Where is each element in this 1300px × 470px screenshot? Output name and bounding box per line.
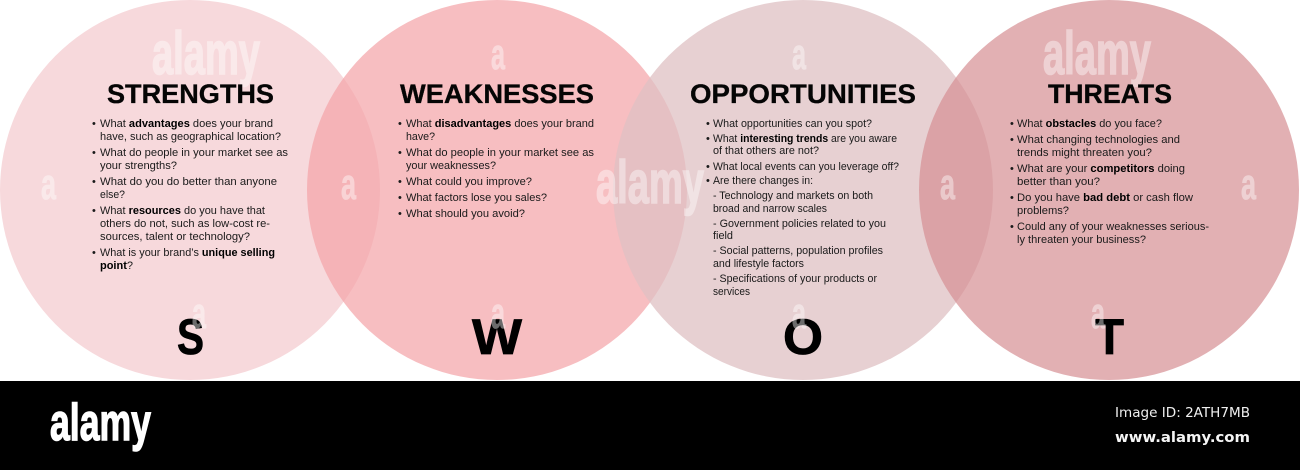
text block: opportunities questions: • — [706, 133, 710, 145]
text block: opportunities questions: services — [713, 286, 750, 298]
watermark small marks: a — [491, 30, 505, 79]
text block: strengths questions: What do people in your market see as — [100, 147, 289, 159]
text block: threats questions: What are your competitors doing — [1017, 163, 1185, 175]
watermark wordmarks: alamy — [596, 149, 704, 216]
watermark wordmarks — [152, 20, 1151, 216]
watermark small marks: a — [192, 289, 206, 338]
letter W: W — [472, 309, 523, 365]
heading: opportunities: OPPORTUNITIES — [690, 79, 916, 109]
text block: strengths questions: What do you do better than anyone — [100, 176, 277, 188]
text block: strengths questions: your strengths? — [100, 160, 177, 172]
text block: strengths questions: point? — [100, 260, 133, 272]
watermark wordmarks: alamy — [1043, 20, 1151, 87]
watermark small marks: a — [341, 160, 356, 209]
text block: strengths questions: • — [92, 176, 96, 188]
text block: strengths questions: • — [92, 247, 96, 259]
text block: opportunities questions: - Specifications of your products or — [713, 273, 877, 285]
text block: threats questions: trends might threaten you? — [1017, 147, 1152, 159]
text block: threats questions: better than you? — [1017, 176, 1100, 188]
footer url: www.alamy.com — [1115, 430, 1250, 446]
watermark wordmarks: alamy — [152, 20, 260, 87]
watermark small marks: a — [41, 160, 56, 209]
text block: strengths questions: • — [92, 118, 96, 130]
panel: threats circle — [919, 0, 1299, 380]
heading: weaknesses: WEAKNESSES — [400, 79, 594, 109]
text block: opportunities questions: Are there changes in: — [713, 175, 813, 187]
text block: strengths questions — [92, 118, 289, 272]
text block: opportunities questions: What interesting trends are you aware — [713, 133, 897, 145]
letter T: T — [1095, 309, 1124, 365]
text block: weaknesses questions: What should you avoid? — [406, 208, 525, 220]
text block: weaknesses questions — [398, 118, 595, 220]
text block: strengths questions: else? — [100, 189, 125, 201]
panel: strengths circle — [0, 0, 380, 380]
text block: weaknesses questions: your weaknesses? — [406, 160, 496, 172]
footer logo: alamy — [50, 394, 151, 452]
text block: threats questions: problems? — [1017, 205, 1069, 217]
text block: strengths questions: What resources do you have that — [100, 205, 265, 217]
heading: threats: THREATS — [1048, 79, 1172, 109]
text block: strengths questions: others do not, such as low-cost re- — [100, 218, 270, 230]
text block: opportunities questions: What opportunities can you spot? — [713, 118, 872, 130]
text block: opportunities questions: What local events can you leverage off? — [713, 161, 899, 173]
text block: weaknesses questions: What disadvantages does your brand — [406, 118, 594, 130]
text block: strengths questions: What advantages does your brand — [100, 118, 273, 130]
text block: opportunities questions: broad and narrow scales — [713, 203, 827, 215]
letter O: O — [783, 309, 823, 365]
text block: threats questions: What changing technologies and — [1017, 134, 1180, 146]
panel: weaknesses circle — [307, 0, 687, 380]
watermark small marks — [41, 30, 1256, 338]
text block: opportunities questions: field — [713, 230, 733, 242]
text block: threats questions: • — [1010, 221, 1014, 233]
text block: opportunities questions: • — [706, 175, 710, 187]
panel: opportunities circle — [613, 0, 993, 380]
text block: opportunities questions: - Government policies related to you — [713, 218, 886, 230]
text block: strengths questions: • — [92, 147, 96, 159]
watermark small marks: a — [792, 30, 806, 79]
letter S: S — [177, 309, 204, 365]
text block: opportunities questions: • — [706, 161, 710, 173]
text block: threats questions: ly threaten your business? — [1017, 234, 1146, 246]
watermark small marks: a — [792, 289, 806, 338]
text block: weaknesses questions: • — [398, 176, 402, 188]
text block: threats questions: • — [1010, 118, 1014, 130]
text block: weaknesses questions: • — [398, 208, 402, 220]
text block: threats questions: Do you have bad debt or cash flow — [1017, 192, 1193, 204]
text block: threats questions: • — [1010, 163, 1014, 175]
text block: threats questions: • — [1010, 192, 1014, 204]
text block: opportunities questions: of that others are not? — [713, 145, 819, 157]
text block: weaknesses questions: What factors lose you sales? — [406, 192, 547, 204]
text block: weaknesses questions: • — [398, 118, 402, 130]
watermark small marks: a — [1241, 160, 1256, 209]
text block: threats questions: Could any of your weaknesses serious- — [1017, 221, 1209, 233]
footer image id: Image ID: 2ATH7MB — [1115, 405, 1250, 421]
text block: opportunities questions — [706, 118, 899, 298]
watermark small marks: a — [940, 160, 955, 209]
text block: opportunities questions: and lifestyle factors — [713, 258, 804, 270]
text block: strengths questions: What is your brand’s unique selling — [100, 247, 275, 259]
watermark small marks: a — [491, 289, 505, 338]
text block: strengths questions: have, such as geographical location? — [100, 131, 281, 143]
heading: strengths: STRENGTHS — [107, 79, 274, 109]
text block: threats questions — [1010, 118, 1209, 246]
text block: threats questions: What obstacles do you face? — [1017, 118, 1162, 130]
text block: weaknesses questions: • — [398, 147, 402, 159]
footer bar — [0, 381, 1300, 470]
text block: weaknesses questions: What do people in your market see as — [406, 147, 595, 159]
text block: opportunities questions: • — [706, 118, 710, 130]
text block: opportunities questions: - Social patterns, population profiles — [713, 245, 883, 257]
text block: threats questions: • — [1010, 134, 1014, 146]
text block: opportunities questions: - Technology and markets on both — [713, 190, 873, 202]
text block: strengths questions: sources, talent or technology? — [100, 231, 250, 243]
watermark small marks: a — [1091, 289, 1105, 338]
text block: weaknesses questions: have? — [406, 131, 435, 143]
text block: weaknesses questions: • — [398, 192, 402, 204]
text block: weaknesses questions: What could you improve? — [406, 176, 532, 188]
text block: strengths questions: • — [92, 205, 96, 217]
